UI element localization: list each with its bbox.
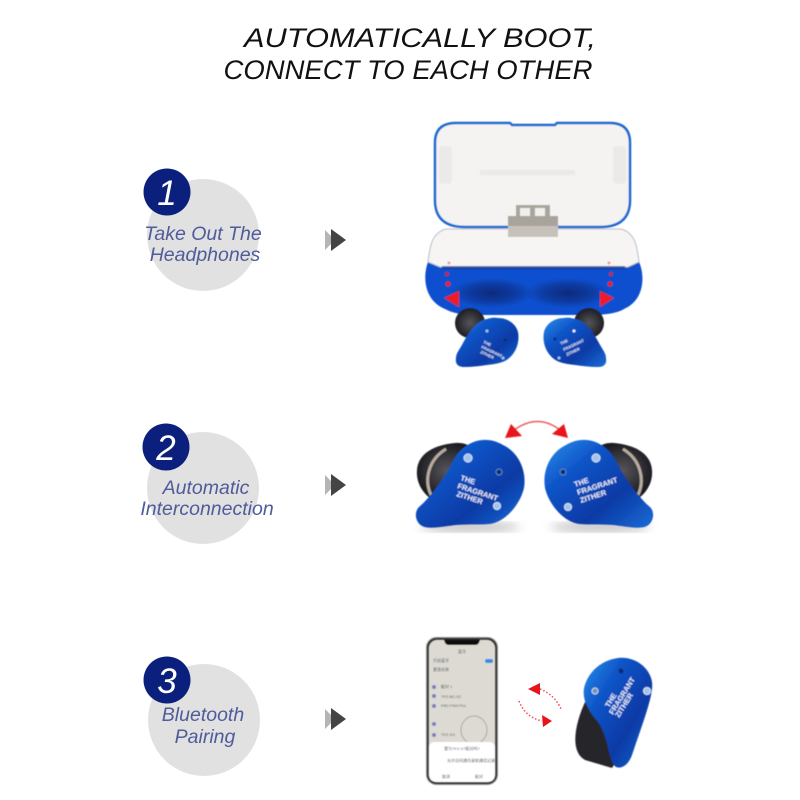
earbud with phone: ZITHER [613, 691, 635, 719]
right large earbud: ZITHER [579, 488, 608, 505]
interconnected earbuds [416, 422, 653, 532]
right large earbud: THE [573, 476, 590, 489]
step 2 number badge: 2 [155, 429, 176, 468]
phone with bluetooth screen: 更改名称 [433, 666, 449, 672]
step 1 label [144, 168, 262, 291]
charging case with earbuds [425, 123, 642, 367]
right large earbud [544, 440, 653, 528]
arrow 3 [325, 708, 346, 730]
phone with bluetooth screen: 配对 1 [441, 683, 453, 689]
step 1 label: Headphones [150, 244, 261, 266]
title: CONNECT TO EACH OTHER [224, 55, 592, 85]
step 3 label: Pairing [175, 726, 236, 748]
left small earbud: THE [483, 339, 492, 347]
phone with bluetooth screen: 要与TFZ-X7配对吗? [444, 745, 481, 751]
phone with bluetooth screen [426, 638, 498, 784]
right small earbud: THE [559, 338, 569, 346]
left small earbud: ZITHER [480, 349, 495, 360]
left large earbud: FRAGRANT [456, 481, 500, 503]
step 3 label: Bluetooth [162, 704, 244, 726]
left small earbud [455, 308, 519, 367]
hinge [508, 205, 558, 237]
phone with bluetooth screen: 开启蓝牙 [433, 657, 449, 663]
arrow 2 [325, 474, 346, 496]
left large earbud [416, 440, 525, 528]
right small earbud: ZITHER [565, 346, 581, 357]
left large earbud: ZITHER [455, 489, 484, 506]
red double arrow [505, 422, 568, 438]
case lid [435, 123, 630, 227]
right small earbud: FRAGRANT [562, 338, 585, 352]
red arrows on case [444, 262, 614, 307]
earbud with phone: FRAGRANT [607, 675, 637, 716]
arrow 1 [325, 229, 346, 251]
phone with bluetooth screen: TFZ-BC-02 [441, 694, 462, 699]
earbud with phone [575, 658, 652, 768]
case base [425, 229, 642, 315]
phone with bluetooth screen: 取消 [442, 773, 450, 779]
step 1 label: Take Out The [144, 223, 262, 245]
title: AUTOMATICALLY BOOT, [242, 23, 596, 53]
right large earbud: FRAGRANT [576, 475, 619, 497]
left small earbud: FRAGRANT [481, 344, 504, 359]
phone with bluetooth screen: 蓝牙 [458, 648, 466, 654]
step 2 label: Automatic [162, 477, 250, 499]
earbud with phone: THE [603, 692, 619, 709]
step 2 label: Interconnection [140, 498, 274, 520]
title [224, 23, 596, 85]
phone with bluetooth screen: TFZ-XX [441, 732, 455, 737]
left large earbud: THE [459, 473, 476, 487]
red sync arrows [519, 683, 561, 727]
step 3 number badge: 3 [157, 662, 177, 701]
step 1 number badge: 1 [157, 174, 177, 213]
phone with bluetooth screen: 配对 [475, 773, 483, 779]
right small earbud [543, 308, 606, 367]
step 2 label [140, 424, 274, 544]
phone with bluetooth screen: 允许访问通讯录和通话记录 [447, 757, 495, 763]
step 3 label [144, 656, 260, 776]
phone with bluetooth screen: FIIO FW3 Pro [441, 703, 466, 708]
